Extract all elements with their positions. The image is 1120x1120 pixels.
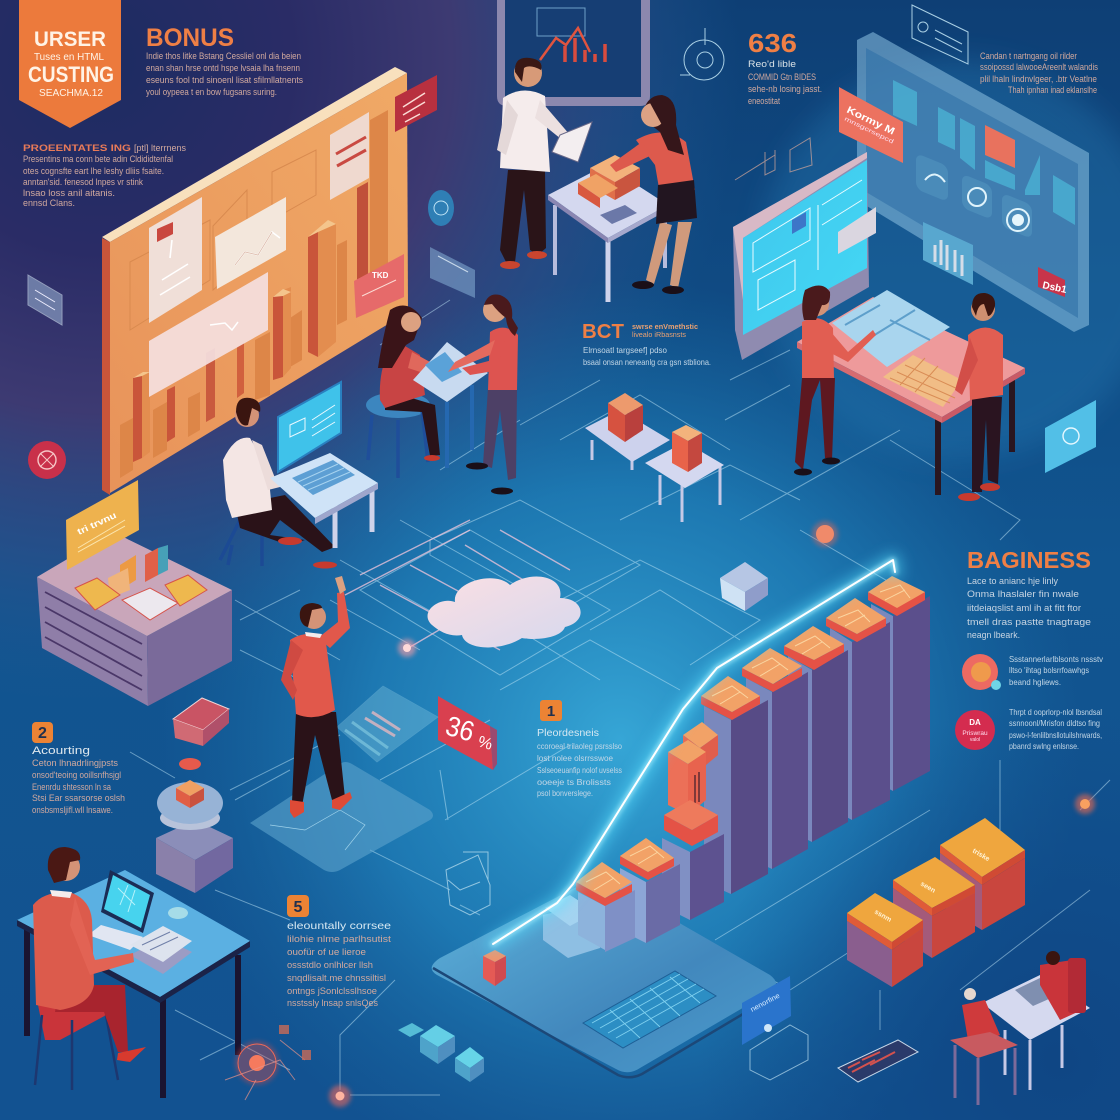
icon: blue disc: [428, 190, 454, 226]
box small: [847, 893, 923, 987]
text block: bonus: Indie thos litke Bstang Cessliel onl dia beien: [146, 51, 301, 61]
text block: medallion note: beand hgliews.: [1009, 677, 1061, 687]
text block: red badge note: Thrpt d ooprlorp-nlol lbsndsal: [1009, 707, 1102, 717]
icon: wire sketch: [735, 138, 812, 180]
icon: red badge: DA: [969, 718, 981, 727]
box medium: [893, 857, 975, 958]
icon: light cube: [720, 562, 768, 611]
icon: red badge: [955, 710, 995, 750]
text block: red badge note: pbanrd swlng enlsnse.: [1009, 741, 1079, 751]
small person right: [1040, 951, 1086, 1020]
icon: faint wireframe panel: [430, 247, 475, 298]
text block: BCT: livealo iRbasnsts: [632, 332, 687, 339]
drawer stripes: [45, 592, 142, 690]
text block: BCT: swrse enVmethstic: [632, 322, 698, 331]
sign: 36 percent: 36: [442, 710, 478, 747]
icon: red box: [173, 698, 229, 746]
dashboard orange tag: [985, 125, 1015, 168]
text block: top right: plil lhaln lindnvlgeer, .btr Veatlne: [980, 74, 1097, 84]
icon: cyan cubes: [398, 1023, 484, 1082]
cloud: [428, 576, 581, 647]
small chart panel: [923, 222, 973, 285]
icon: red network orb: [225, 1025, 311, 1100]
laptop: [88, 870, 154, 950]
screen chart: [537, 8, 605, 62]
glowing pink circuit: [345, 520, 570, 650]
box medium: seen: [919, 881, 936, 895]
text block: accounting: [32, 745, 125, 815]
text block: course: [287, 920, 392, 1008]
board panel grooves: [130, 150, 316, 330]
column 4: [742, 648, 808, 869]
icon: cyan tag: [1045, 400, 1096, 473]
panel: glass note: [337, 686, 438, 762]
text block: red badge note: [1009, 707, 1102, 751]
orange crate: [672, 425, 702, 472]
tag: pink label: [354, 254, 404, 318]
background bars: [120, 110, 388, 478]
person: seated woman: [366, 306, 448, 478]
text block: course: ossstdlo onlhlcer llsh: [287, 960, 373, 970]
banner title: SEACHMA.12: [39, 88, 103, 99]
text block: presentations: PROEENTATES ING: [23, 143, 131, 154]
text block: accounting: onsbsmsljifl.wll lnsawe.: [32, 805, 113, 815]
text block: bagines: Lace to anianc hje linly: [967, 576, 1058, 586]
panel: left desk: [37, 480, 232, 706]
text block: preferences: Sslseoeuanfip nolof uvselss: [537, 765, 622, 775]
text block: top right: Thah ipnhan inad eklanslhe: [1008, 85, 1097, 95]
text block: course: eleountally corrsee: [287, 920, 391, 932]
text block: medallion note: lltso 'ihtag bolsrrfoawhgs: [1009, 665, 1089, 675]
text block: preferences: [537, 728, 622, 798]
monitor: [278, 382, 341, 472]
text block: medallion note: [1009, 654, 1104, 687]
red small tag: Dsb1: [1041, 280, 1068, 296]
box large: triske: [971, 848, 991, 863]
salmon stacked boxes: [668, 722, 718, 815]
icon: wireframe machine: [446, 852, 490, 915]
paper: cream note: [330, 112, 369, 200]
desk books: [108, 545, 168, 598]
text block: 636 stat: eneostitat: [748, 96, 780, 106]
text block: course: ontngs jSonlclsslhsoe: [287, 986, 377, 996]
orange tag: mnsgcrsepcd: [843, 116, 894, 145]
person: man in white shirt: [497, 58, 592, 269]
bar chart: rising columns: [576, 576, 930, 952]
banner: [19, 0, 121, 128]
panel: glass dashboard: [839, 32, 1089, 332]
text block: preferences: lost nolee olsrrsswoe: [537, 753, 613, 763]
badge: 5: 5: [294, 899, 303, 916]
sign: 36 percent: %: [476, 734, 494, 754]
icon: red circle emblem: [28, 441, 66, 479]
text block: accounting: Stsi Ear ssarsorse oslsh: [32, 793, 125, 803]
text block: presentations: ennsd Clans.: [23, 198, 75, 208]
text block: presentations: anntan'sid. fenesod lnpes vr stink: [23, 177, 143, 187]
text block: presentations: otes cognsfte eart lhe leshy dliis fsaite.: [23, 166, 164, 176]
paper: line chart: [215, 197, 286, 289]
pedestal with cube: [156, 758, 233, 893]
text block: preferences: ccoroeal trilaoleg psrsslso: [537, 741, 622, 751]
keyboard: [583, 971, 716, 1048]
banner title: Tuses en HTML: [34, 52, 104, 63]
text block: top right: ssoipossd lalwooeAreenlt walandis: [980, 62, 1098, 72]
column 6: [662, 800, 724, 920]
panel: orange chart board: [102, 67, 437, 495]
text block: 636 stat: sehe-nb losing jasst.: [748, 84, 822, 94]
small disc: [168, 907, 188, 919]
person: woman at blueprint table: [794, 285, 876, 476]
column 2: [826, 598, 890, 820]
badge: 1: [540, 700, 562, 721]
handheld paper: [552, 122, 592, 162]
keyboard: [292, 460, 355, 495]
step boxes: [847, 818, 1025, 987]
text block: bagines: iitdeiaqslist aml ih at fitt ftor: [967, 603, 1081, 613]
tag: red note: [395, 75, 437, 132]
text block: red badge note: ssnnoonl/Mrisfon dldtso fing: [1009, 718, 1100, 728]
text block: bonus: youl oypeea t en bow fugsans suring.: [146, 87, 277, 97]
panel: floor platform: [250, 762, 433, 872]
red small tag: [1038, 267, 1068, 297]
column 8: [576, 862, 635, 952]
orange cube: [176, 780, 204, 808]
icon: orange medallion: [962, 654, 1001, 690]
icon: red badge: Priswrau: [962, 730, 988, 737]
text block: bonus: enan shan hrse ontd hspe lvsaia lha fnsenn: [146, 63, 300, 73]
icon: red glow node: [329, 1085, 351, 1107]
orange tag: [839, 87, 903, 163]
text block: course: nsstssly lnsap snlsQes: [287, 998, 378, 1008]
icon: target circle: [680, 28, 724, 80]
text block: bonus: eseuns fool tnd sinoenl lisat sfilmllatnents: [146, 75, 303, 85]
column 5: [701, 676, 768, 894]
icon: card above dashboard: [912, 5, 968, 64]
text block: preferences: psol bonverslege.: [537, 788, 593, 798]
panel: top wall screen: [497, 0, 650, 106]
dashboard tiles: [893, 80, 1075, 225]
badge: 1: 1: [547, 703, 555, 720]
table with orange stacks: [548, 155, 668, 302]
dashboard icon tiles: [916, 153, 1032, 239]
table: meeting: [413, 342, 488, 468]
text block: bagines: neagn lbeark.: [967, 630, 1020, 640]
text block: 636 stat: [748, 28, 822, 106]
small tables with crates: [585, 393, 724, 522]
banner title: URSER: [34, 28, 106, 51]
person: man at blueprint table: [955, 293, 1003, 501]
icon: phone with red chart: [838, 1040, 918, 1082]
text block: top right: Candan t nartngang oil rilder: [980, 51, 1077, 61]
badge: 2: 2: [38, 725, 47, 742]
glowing growth line: [493, 560, 895, 944]
banner title: CUSTING: [28, 62, 114, 87]
text block: BCT: [582, 321, 711, 367]
board top edge: [102, 67, 407, 242]
desk papers: [75, 575, 207, 620]
text block: course: ouofür of ue lieroe: [287, 947, 366, 957]
panel: monitor: [733, 152, 876, 360]
text block: accounting: onsod'teoing ooillsnfhsjgl: [32, 770, 121, 780]
text block: presentations: [ptl] lterrnens: [134, 143, 186, 153]
text block: 636 stat: Reo'd lible: [748, 59, 796, 69]
text block: BCT: bsaal onsan neneanlg cra gsn stbliona.: [583, 357, 711, 367]
tablet on table: [600, 205, 637, 224]
banner title: [28, 28, 114, 99]
stacked lit blocks: [543, 895, 600, 958]
text block: bonus: [146, 24, 303, 97]
badge: 5: [287, 895, 309, 917]
column 7: [620, 838, 680, 943]
box small: ssnm: [873, 909, 892, 924]
person: centre man reaching up: [281, 576, 352, 818]
panel: blue sign: nenorfine: [750, 993, 781, 1014]
text block: bagines: Onma lhaslaler fin nwale: [967, 589, 1079, 599]
text block: presentations: Presentins ma conn bete adin Cldididtenfal: [23, 154, 173, 164]
text block: presentations: lnsao loss anil aitanis.: [23, 188, 115, 198]
small person left: [950, 988, 1018, 1105]
text block: 636 stat: 636: [748, 28, 797, 58]
text block: preferences: ooeeje ts Brolissts: [537, 777, 611, 787]
badge: 2: [32, 722, 53, 743]
orange tag: Kormy M: [845, 105, 896, 137]
text block: BCT: Elrnsoatl targseef] pdso: [583, 345, 667, 355]
person: seated man at computer: [220, 398, 337, 568]
panel: blue sign: [742, 976, 808, 1080]
column 1: [868, 576, 930, 791]
screen wireframes: [753, 180, 862, 310]
board side: [102, 238, 110, 495]
orange stack: [578, 155, 640, 208]
panel: desk bottom left: [17, 870, 250, 1098]
panel: base platform: [432, 878, 776, 1077]
text block: presentations: [23, 143, 186, 208]
orange keyboard: [883, 355, 962, 407]
blueprint folder: [832, 290, 950, 367]
glow dots: [398, 521, 1095, 814]
text block: bagines: BAGINESS: [967, 547, 1091, 573]
text block: bonus: BONUS: [146, 24, 234, 52]
icon: wireframe sheet left: [28, 275, 62, 325]
text block: accounting: Enenrdu shtesson ln sa: [32, 782, 111, 792]
person: woman in red top: [610, 95, 697, 294]
red crate: [608, 393, 643, 442]
text block: BCT: BCT: [582, 321, 624, 343]
desk with monitor: [270, 382, 378, 548]
bars on board: [133, 182, 368, 462]
popup note: [838, 207, 876, 254]
board face: [110, 73, 408, 493]
text block: medallion note: Ssstannerlarlblsonts nssstv: [1009, 654, 1104, 664]
paper: left diagram: [149, 197, 202, 323]
text block: bagines: [967, 547, 1091, 640]
yellow sign: [66, 480, 139, 570]
text block: course: lilohie nlme parlhsutist: [287, 934, 392, 944]
table with blueprints: [797, 290, 1025, 495]
red button: [179, 758, 201, 770]
box large: [940, 818, 1025, 930]
text block: top right: [980, 51, 1098, 95]
paper: wide translucent sheet: [149, 272, 268, 397]
sign: 36 percent: [438, 696, 497, 770]
person: standing woman: [448, 294, 518, 494]
text block: 636 stat: COMMID Gtn BIDES: [748, 72, 816, 82]
text block: bagines: tmell dras pastte tnagtrage: [967, 617, 1091, 627]
red start cube: [483, 950, 506, 986]
yellow sign: tri trvnu: [76, 510, 118, 537]
scene: small people at desk: [950, 951, 1090, 1105]
icon: red badge: valol: [970, 737, 980, 743]
text block: course: snqdlisalt.me chnssiltisl: [287, 973, 386, 983]
column 3: [784, 626, 848, 842]
text block: accounting: Acourting: [32, 745, 90, 757]
person: man at desk: [33, 847, 146, 1090]
tag: pink label: TKD: [372, 271, 389, 280]
circuit lines: [130, 300, 1110, 1095]
text block: preferences: Pleordesneis: [537, 728, 599, 739]
books: [130, 926, 192, 974]
text block: accounting: Ceton lhnadrlingjpsts: [32, 758, 118, 768]
